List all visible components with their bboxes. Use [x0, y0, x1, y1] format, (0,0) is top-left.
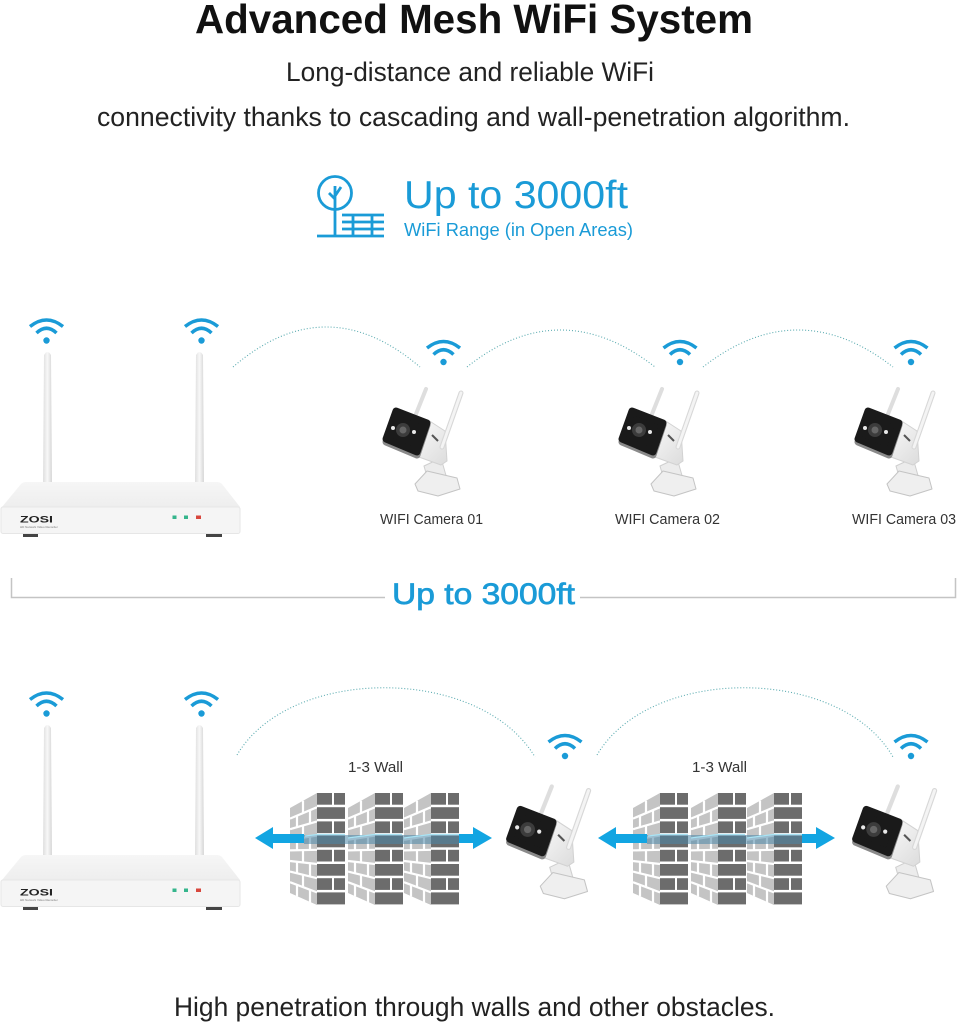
wifi icon: second router antenna left: [30, 693, 63, 717]
first wall camera: [510, 786, 589, 899]
wifi icon: camera 02: [664, 342, 696, 365]
brick walls with arrows 1: [255, 793, 492, 905]
wifi icon: second router antenna right: [185, 693, 218, 717]
arc: first camera to second camera: [597, 688, 893, 757]
range caption: WiFi Range (in Open Areas): [404, 219, 633, 240]
icon: tree and bench: [317, 176, 384, 236]
camera 03: [858, 389, 933, 496]
router: walls: ZOSI: [20, 888, 53, 898]
range headline: Up to 3000ft: [404, 174, 628, 217]
router: walls: [1, 725, 240, 910]
camera 03 label: WIFI Camera 03: [852, 512, 956, 528]
panel: open-area mesh chain: [1, 320, 956, 537]
wifi icon: camera 01: [427, 342, 460, 365]
subtitle line 1: Long-distance and reliable WiFi: [286, 57, 654, 87]
camera 02 label: WIFI Camera 02: [615, 512, 720, 528]
distance label: Up to 3000ft: [392, 578, 576, 611]
footer caption: High penetration through walls and other obstacles.: [174, 992, 775, 1022]
arc: camera 01 to camera 02: [467, 330, 655, 367]
wall label 1: 1-3 Wall: [348, 760, 403, 776]
wifi icon: second wall camera: [894, 736, 928, 759]
camera 01 label: WIFI Camera 01: [380, 512, 483, 528]
router: open area: [1, 352, 240, 537]
distance bracket: [12, 578, 956, 598]
router: open area: HD Network Video Recorder: [20, 525, 58, 529]
arc: router to first camera: [237, 688, 535, 757]
router: open area: ZOSI: [20, 514, 53, 524]
brick walls with arrows 2: [598, 793, 835, 905]
wall label 2: 1-3 Wall: [692, 760, 747, 776]
panel: wall penetration: [1, 688, 935, 910]
arc: camera 02 to camera 03: [703, 330, 893, 367]
wifi icon: router antenna right: [185, 320, 218, 344]
router: walls: HD Network Video Recorder: [20, 898, 58, 902]
wifi icon: router antenna left: [30, 320, 63, 344]
camera 01: [386, 389, 461, 496]
camera 02: [622, 389, 697, 496]
arc: router to camera 01: [233, 327, 420, 367]
wifi icon: camera 03: [894, 342, 928, 365]
wifi icon: first wall camera: [548, 736, 582, 759]
second wall camera: [856, 786, 935, 899]
subtitle line 2: connectivity thanks to cascading and wall-penetration algorithm.: [97, 102, 850, 132]
